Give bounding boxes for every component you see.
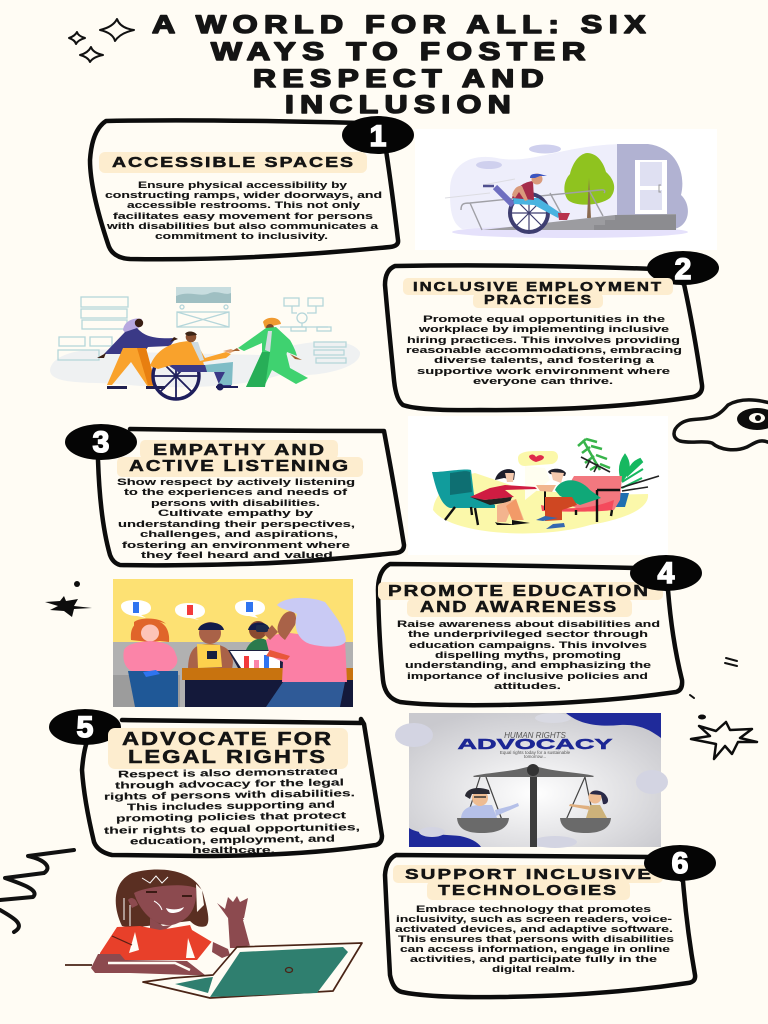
body text 3: to the experiences and needs of	[124, 487, 348, 498]
card outline 4	[378, 564, 682, 705]
body text 1	[105, 180, 382, 242]
decoration: black squiggle	[0, 850, 74, 932]
number badge 2	[647, 251, 719, 286]
illustration: three colleagues with wireframes	[50, 287, 360, 399]
panel: support inclusive technologies	[385, 845, 716, 997]
heading 5: LEGAL RIGHTS	[128, 747, 327, 767]
body text 6: activated devices, and adaptive software.	[395, 924, 673, 935]
heading 4	[378, 582, 663, 617]
body text 6: digital realm.	[492, 964, 575, 975]
body text 2	[406, 314, 682, 387]
body text 4: attitudes.	[494, 681, 561, 692]
body text 4: Raise awareness about disabilities and	[397, 619, 660, 630]
body text 2: supportive work environment where	[417, 366, 670, 377]
body text 2: reasonable accommodations, embracing	[406, 345, 682, 356]
heading 2: INCLUSIVE EMPLOYMENT	[413, 279, 663, 294]
heading 3	[117, 440, 363, 477]
heading 4: PROMOTE EDUCATION	[388, 583, 650, 600]
body text 2: Promote equal opportunities in the	[423, 314, 665, 325]
body text 6: can access information, engage in online	[400, 944, 670, 955]
illustration: wheelchair user on ramp	[415, 129, 717, 250]
illustration: human rights advocacy poster: ADVOCACY	[458, 736, 612, 753]
heading 3: EMPATHY AND	[153, 442, 326, 459]
heading 3: ACTIVE LISTENING	[129, 458, 350, 475]
title: A WORLD FOR ALL: SIX	[152, 11, 652, 39]
card outline 5	[82, 719, 382, 856]
body text 5: This includes supporting and	[127, 800, 335, 813]
body text 5: rights of persons with disabilities.	[104, 788, 355, 803]
panel: inclusive employment practices	[385, 251, 719, 410]
body text 2: everyone can thrive.	[473, 376, 613, 387]
title	[152, 11, 652, 119]
body text 1: commitment to inclusivity.	[155, 231, 328, 242]
body text 1: facilitates easy movement for persons	[113, 211, 373, 222]
heading 6: TECHNOLOGIES	[438, 882, 618, 899]
body text 1: Ensure physical accessibility by	[138, 180, 348, 191]
panel: advocate for legal rights	[49, 709, 382, 856]
decoration: eye blob	[674, 400, 768, 450]
body text 5: education, employment, and	[130, 834, 335, 847]
heading 2	[403, 278, 673, 308]
body text 2: workplace by implementing inclusive	[418, 324, 669, 335]
heading 1	[99, 152, 367, 173]
illustration: human rights advocacy poster: tomorrow...	[524, 754, 546, 759]
number badge 1	[342, 116, 414, 154]
body text 3	[117, 477, 356, 561]
illustration: human rights advocacy poster: HUMAN RIGHTS	[504, 731, 567, 740]
decoration: small marks	[690, 658, 737, 698]
body text 5: Respect is also demonstrated	[118, 766, 338, 781]
decoration: outlined spiky star and dot	[691, 714, 757, 759]
number badge 1: 1	[370, 120, 386, 153]
body text 4: education campaigns. This involves	[409, 640, 647, 651]
card outline 6	[385, 855, 695, 997]
body text 5	[104, 766, 361, 856]
body text 3: Cultivate empathy by	[158, 508, 314, 519]
body text 1: accessible restrooms. This not only	[127, 200, 361, 211]
illustration: human rights advocacy poster	[395, 713, 668, 848]
title: RESPECT AND	[253, 65, 550, 93]
number badge 5: 5	[77, 711, 93, 744]
number badge 3	[65, 424, 137, 460]
body text 3: persons with disabilities.	[151, 498, 320, 509]
heading 1: ACCESSIBLE SPACES	[112, 154, 355, 171]
number badge 5	[49, 709, 121, 745]
body text 4: importance of inclusive policies and	[407, 671, 648, 682]
body text 3: challenges, and aspirations,	[140, 529, 338, 540]
icon: sparkles	[69, 19, 134, 62]
body text 6: This ensures that persons with disabilities	[398, 934, 674, 945]
body text 5: healthcare.	[192, 845, 275, 856]
body text 3: they feel heard and valued.	[141, 550, 337, 561]
illustration: girl waving at laptop	[65, 869, 362, 998]
body text 3: fostering an environment where	[122, 540, 350, 551]
body text 4	[397, 619, 660, 692]
body text 4: dispelling myths, promoting	[435, 650, 621, 661]
title: WAYS TO FOSTER	[211, 38, 592, 66]
body text 6	[395, 904, 674, 975]
illustration: team meeting at a desk	[113, 579, 353, 707]
panel: accessible spaces	[90, 116, 414, 259]
heading 4: AND AWARENESS	[420, 599, 618, 616]
card outline 3	[98, 429, 404, 565]
body text 2: hiring practices. This involves providing	[407, 335, 680, 346]
title: INCLUSION	[285, 91, 517, 119]
decoration: small black star and dot	[45, 581, 92, 617]
heading 2: PRACTICES	[484, 292, 593, 307]
body text 4: the underprivileged sector through	[408, 629, 648, 640]
body text 6: activities, and participate fully in the	[410, 954, 657, 965]
number badge 2: 2	[675, 253, 691, 286]
panel: empathy and active listening	[65, 424, 404, 565]
body text 3: understanding their perspectives,	[118, 519, 356, 530]
number badge 6	[644, 845, 716, 881]
body text 1: constructing ramps, wider doorways, and	[105, 190, 382, 201]
body text 1: with disabilities but also communicates a	[106, 221, 379, 232]
body text 6: inclusivity, such as screen readers, voice-	[396, 914, 672, 925]
body text 6: Embrace technology that promotes	[416, 904, 651, 915]
body text 2: diverse talents, and fostering a	[434, 355, 655, 366]
heading 6: SUPPORT INCLUSIVE	[405, 866, 653, 883]
body text 3: Show respect by actively listening	[117, 477, 355, 488]
number badge 4: 4	[658, 557, 675, 590]
panel: promote education and awareness	[378, 555, 702, 705]
body text 4: understanding, and emphasizing the	[405, 660, 651, 671]
heading 5: ADVOCATE FOR	[122, 729, 333, 749]
number badge 3: 3	[93, 426, 109, 459]
number badge 6: 6	[672, 847, 688, 880]
number badge 4	[630, 555, 702, 591]
body text 5: their rights to equal opportunities,	[104, 822, 361, 837]
heading 6	[393, 865, 663, 900]
heading 5	[108, 728, 348, 769]
card outline 1	[90, 120, 398, 259]
body text 5: promoting policies that protect	[116, 810, 347, 825]
body text 5: through advocacy for the legal	[115, 777, 344, 792]
card outline 2	[385, 265, 702, 410]
illustration: human rights advocacy poster: Equal rights today for a sustainable	[500, 750, 571, 755]
illustration: two people holding hands in armchairs	[408, 416, 668, 555]
